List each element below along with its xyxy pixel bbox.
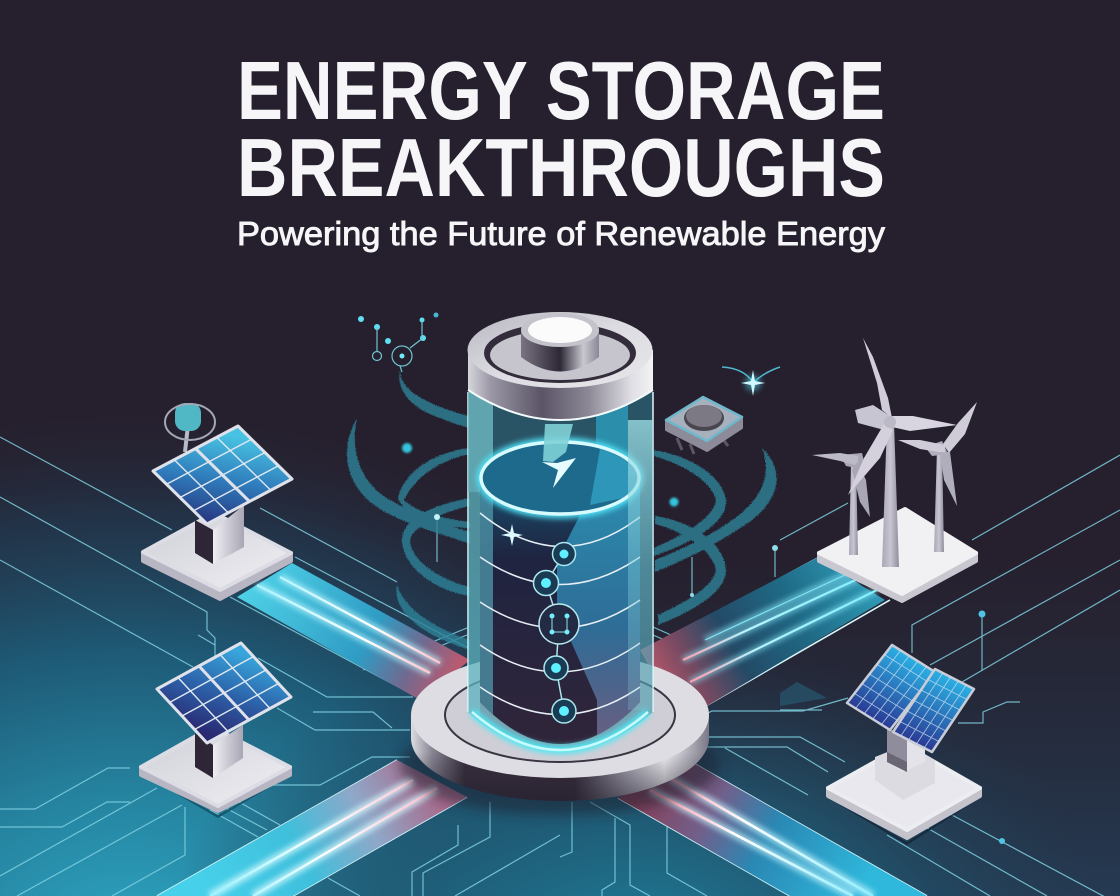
energy beam: upper left	[237, 563, 470, 700]
cell separator lines	[480, 513, 640, 714]
panel surface	[153, 426, 292, 524]
bright circuit lines	[157, 600, 927, 896]
panel base	[135, 727, 296, 818]
icon: constellation network	[358, 312, 438, 372]
panel base	[143, 513, 291, 599]
pillar	[195, 505, 244, 564]
solar panel: upper left	[143, 403, 292, 599]
pillar	[195, 725, 243, 778]
panel base	[820, 745, 988, 845]
battery base plate	[411, 652, 709, 801]
glass highlights	[468, 420, 653, 714]
energy beam: lower right	[618, 760, 927, 896]
title line 2: BREAKTHROUGHS	[237, 121, 885, 214]
battery	[400, 312, 720, 815]
turbine platform	[819, 509, 976, 601]
title	[237, 44, 885, 214]
icon: glass sensor globe	[165, 403, 215, 452]
panel surface: left half	[847, 645, 935, 730]
molecule node 2	[534, 570, 558, 596]
energy beam: lower left	[157, 760, 467, 896]
panel surface	[157, 643, 291, 743]
positive terminal	[521, 313, 599, 372]
icon: lightning bolt	[542, 424, 576, 488]
glass tube	[468, 392, 653, 751]
icon: glowing dots and sparkles	[402, 367, 1005, 844]
solar panel: lower left	[135, 643, 296, 818]
molecule node 5	[552, 699, 576, 723]
solar panel: lower right	[820, 645, 988, 845]
subtitle: Powering the Future of Renewable Energy	[237, 215, 886, 252]
panel surface: right half	[893, 669, 974, 752]
energy beam: upper right	[640, 558, 885, 722]
turbine: right	[898, 402, 977, 552]
molecule chain	[534, 542, 579, 723]
glowing cell top	[481, 442, 639, 514]
turbine: centre	[848, 338, 957, 567]
molecule node 1	[552, 542, 576, 566]
turbine: left	[812, 453, 870, 555]
base shadow	[400, 715, 720, 815]
molecule node 4	[544, 656, 568, 680]
circuit lines	[0, 437, 1120, 896]
inner energy cell	[480, 478, 640, 760]
title line 1: ENERGY STORAGE	[237, 44, 885, 137]
sparkle on cell	[501, 524, 523, 546]
faint mountain shape	[780, 682, 827, 706]
bottom glow ring	[472, 712, 648, 750]
molecule node 3	[539, 604, 579, 644]
icon: microchip	[666, 397, 742, 454]
wind turbines	[812, 338, 977, 601]
swirling energy ribbons	[347, 370, 777, 650]
battery metal cap	[468, 312, 653, 420]
pedestal and stem	[875, 728, 935, 800]
